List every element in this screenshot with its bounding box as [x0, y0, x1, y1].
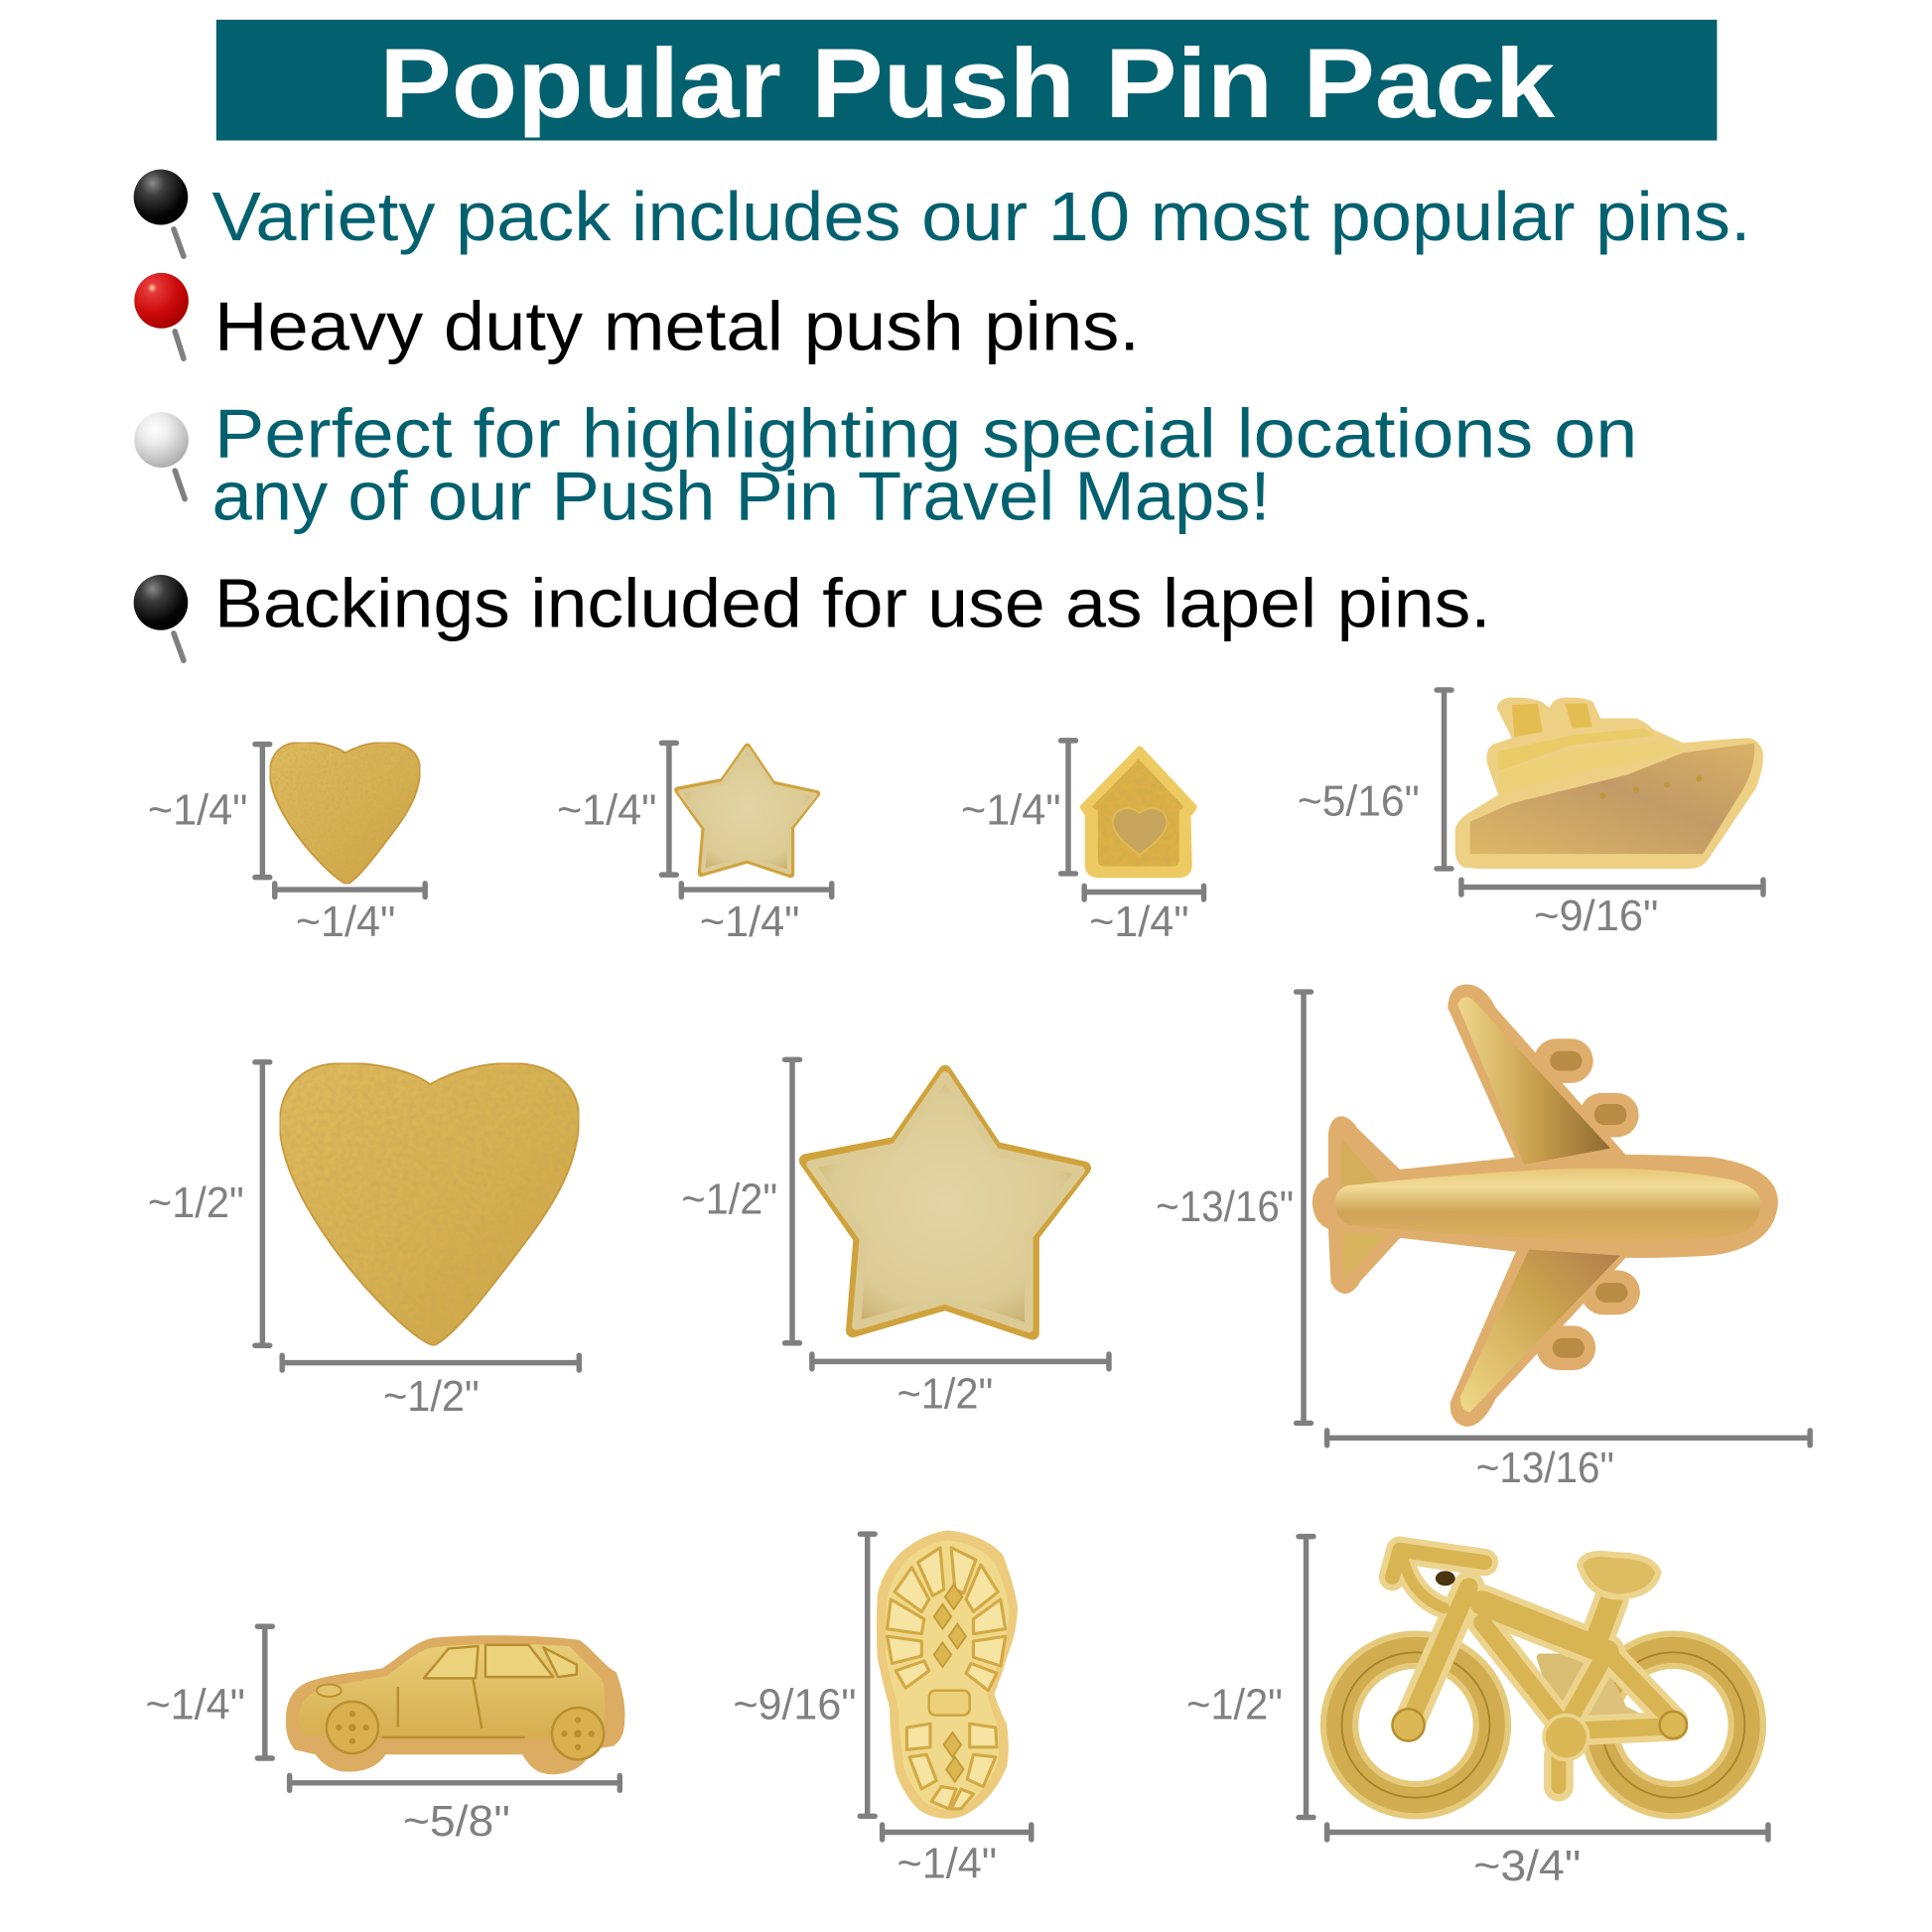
icon: white push pin [134, 412, 189, 499]
pin: small house: ~1/4" [1089, 898, 1189, 946]
pin: small heart: ~1/4" [148, 786, 247, 834]
bullet 1 [134, 170, 1751, 256]
pin: airplane: ~13/16" [1156, 1183, 1294, 1231]
pin: cruise ship: ~9/16" [1534, 893, 1658, 940]
icon: red push pin [134, 273, 189, 358]
pin: small house [961, 741, 1204, 946]
pin: small heart: ~1/4" [296, 898, 395, 946]
pin: boot sole: ~1/4" [897, 1840, 997, 1887]
pin: large star: ~1/2" [897, 1371, 993, 1419]
text: backings: Backings included for use as lapel pins. [214, 565, 1491, 642]
bullet 2 [134, 273, 1140, 364]
pin: bicycle: ~3/4" [1473, 1843, 1581, 1890]
pin: cruise ship [1298, 690, 1763, 940]
pin: boot sole: ~9/16" [733, 1681, 857, 1728]
pin: large star: ~1/2" [681, 1175, 777, 1223]
text: perfect for highlighting: any of our Push Pin Travel Maps! [211, 458, 1271, 535]
text: perfect for highlighting [211, 394, 1637, 535]
pin: small heart [148, 743, 425, 946]
text: heavy duty: Heavy duty metal push pins. [214, 287, 1140, 364]
pin: boot sole [733, 1530, 1032, 1887]
icon: black push pin [134, 170, 188, 256]
pin: small star [557, 743, 832, 946]
icon: black push pin [134, 575, 188, 660]
pin: car: ~1/4" [145, 1681, 245, 1728]
text: perfect for highlighting: Perfect for highlighting special locations on [214, 394, 1637, 472]
pin: car [145, 1626, 624, 1846]
pin: small house: ~1/4" [961, 786, 1061, 834]
bullet 4 [134, 565, 1491, 660]
pin: airplane [1156, 985, 1810, 1492]
pin: bicycle: ~1/2" [1186, 1681, 1283, 1728]
pin: large heart [148, 1062, 579, 1421]
bullet 3 [134, 394, 1637, 535]
pin: cruise ship: ~5/16" [1298, 778, 1420, 826]
pin: small star: ~1/4" [700, 898, 799, 946]
pin: large heart: ~1/2" [148, 1179, 244, 1227]
title: Popular Push Pin Pack [379, 29, 1556, 139]
pin: large star [681, 1059, 1109, 1419]
bullet list [134, 170, 1751, 660]
pin: airplane: ~13/16" [1476, 1445, 1614, 1492]
title banner [216, 20, 1717, 140]
pin: bicycle [1186, 1537, 1768, 1890]
text: variety pack: Variety pack includes our 10 most popular pins. [211, 178, 1751, 255]
pin: car: ~5/8" [403, 1798, 510, 1846]
pin: small star: ~1/4" [557, 786, 656, 834]
pin: large heart: ~1/2" [383, 1373, 480, 1421]
